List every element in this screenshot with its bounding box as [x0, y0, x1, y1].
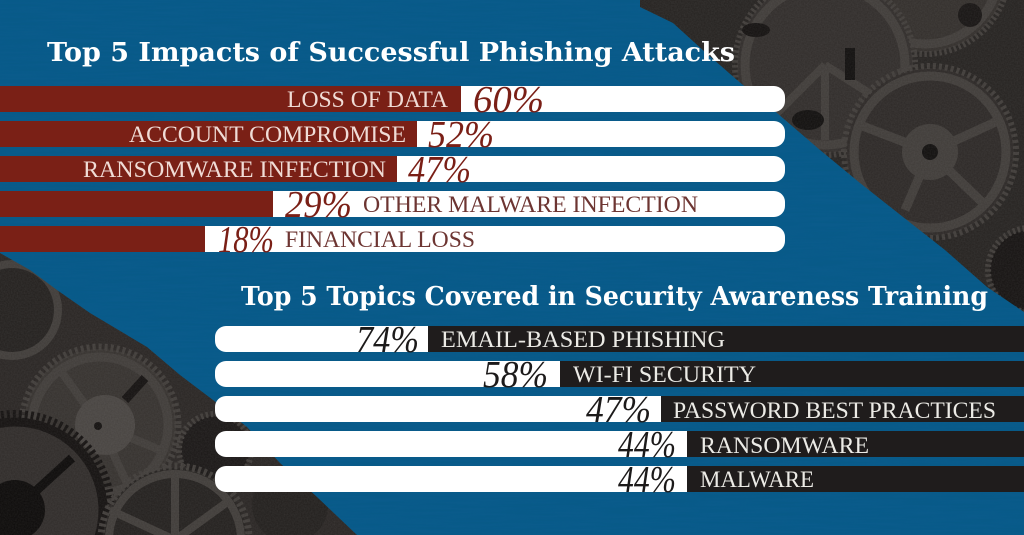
- bar: ransomware 44%: 44%: [618, 424, 676, 466]
- bar: malware 44%: MALWARE: [700, 467, 814, 492]
- bar: ransomware infection 47%: RANSOMWARE INFECTION: [83, 157, 386, 182]
- bar: other malware infection 29%: OTHER MALWARE INFECTION: [363, 192, 698, 217]
- bar: wi-fi security 58%: 58%: [483, 354, 548, 396]
- bar: loss of data 60%: LOSS OF DATA: [287, 87, 448, 112]
- bar: other malware infection 29%: 29%: [285, 184, 352, 226]
- bar chart: topics: [215, 319, 1024, 501]
- bar: financial loss 18%: 18%: [218, 219, 274, 261]
- bar: loss of data 60%: [0, 79, 785, 121]
- bar: malware 44%: 44%: [618, 459, 676, 501]
- bar: password best practices 47%: [215, 389, 1024, 431]
- title: topics: Top 5 Topics Covered in Security Awareness Training: [241, 282, 988, 312]
- bar: malware 44%: [215, 459, 1024, 501]
- bar: ransomware infection 47%: 47%: [408, 149, 471, 191]
- bar: email-based phishing 74%: [215, 319, 1024, 361]
- bar: password best practices 47%: PASSWORD BEST PRACTICES: [673, 398, 996, 423]
- bar: ransomware 44%: RANSOMWARE: [700, 433, 869, 458]
- bar: account compromise 52%: 52%: [428, 114, 494, 156]
- bar chart: impacts: [0, 79, 785, 261]
- image: gears bottom left: [0, 253, 357, 535]
- bar: account compromise 52%: ACCOUNT COMPROMISE: [129, 122, 406, 147]
- bar: email-based phishing 74%: EMAIL-BASED PHISHING: [441, 327, 725, 352]
- bar: financial loss 18%: FINANCIAL LOSS: [285, 227, 475, 252]
- bar: ransomware infection 47%: [0, 149, 785, 191]
- bar: loss of data 60%: 60%: [473, 79, 544, 121]
- bar: other malware infection 29%: [0, 184, 785, 226]
- bar: email-based phishing 74%: 74%: [356, 319, 419, 361]
- title: impacts: Top 5 Impacts of Successful Phishing Attacks: [47, 38, 735, 68]
- image: gears top right: [640, 0, 1024, 312]
- bar: account compromise 52%: [0, 114, 785, 156]
- bar: ransomware 44%: [215, 424, 1024, 466]
- bar: wi-fi security 58%: WI-FI SECURITY: [573, 362, 756, 387]
- bar: password best practices 47%: 47%: [586, 389, 651, 431]
- bar: financial loss 18%: [0, 219, 785, 261]
- bar: wi-fi security 58%: [215, 354, 1024, 396]
